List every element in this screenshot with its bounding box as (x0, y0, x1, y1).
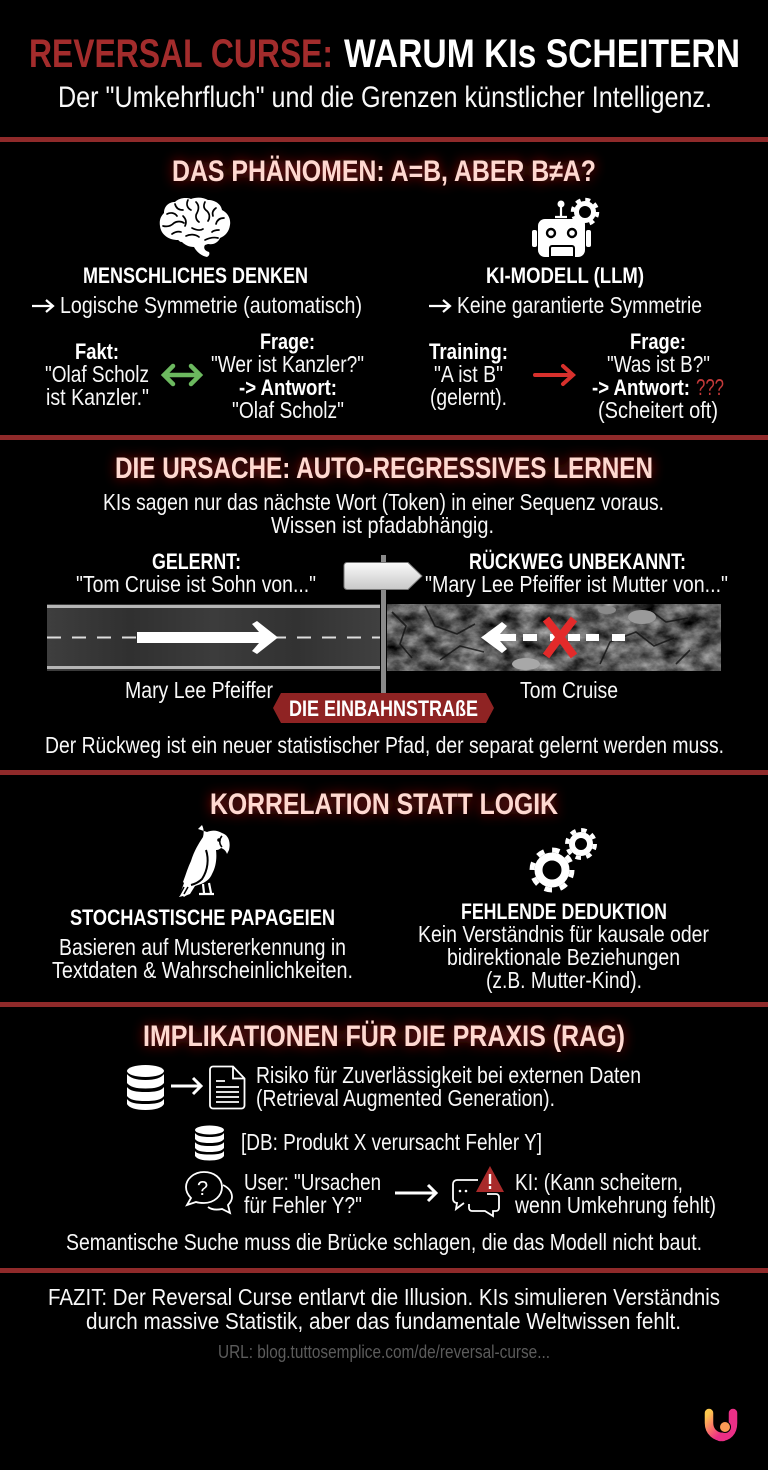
arrow (395, 1185, 436, 1201)
icon: gears (532, 830, 595, 890)
user text: für Fehler Y?" (244, 1192, 362, 1218)
right column: ki-modell: Training: (429, 339, 508, 364)
arrow: green double (164, 366, 200, 384)
road labels: Mary Lee Pfeiffer (125, 677, 273, 703)
arrow (429, 300, 450, 312)
broken road (387, 604, 721, 671)
left column: menschliches denken: Fakt: (75, 339, 119, 364)
label: rückweg unbekannt: RÜCKWEG UNBEKANNT: (469, 549, 686, 574)
right block: fehlende deduktion: FEHLENDE DEDUKTION (461, 899, 667, 924)
signpost (344, 555, 422, 695)
left column: menschliches denken: "Wer ist Kanzler?" (211, 351, 364, 377)
banner: die einbahnstraße: DIE EINBAHNSTRAßE (289, 696, 478, 721)
banner: die einbahnstraße (273, 693, 494, 723)
logo (709, 1413, 733, 1437)
icon: document (210, 1066, 244, 1108)
db text: [DB: Produkt X verursacht Fehler Y] (241, 1129, 542, 1155)
right block: fehlende deduktion: (z.B. Mutter-Kind). (486, 967, 642, 993)
left column: menschliches denken: -> Antwort: (239, 375, 337, 400)
right column: ki-modell (429, 263, 724, 423)
arrow: blocked return (481, 622, 625, 653)
explanation text: Wissen ist pfadabhängig. (271, 512, 494, 538)
risk text (256, 1062, 641, 1111)
heading: die ursache: DIE URSACHE: AUTO-REGRESSIVES LERNEN (115, 452, 653, 485)
label: rückweg unbekannt (425, 549, 728, 597)
icon: parrot (179, 825, 230, 897)
right column: ki-modell: ??? (696, 374, 724, 400)
left column: menschliches denken: "Olaf Scholz (45, 361, 149, 387)
road labels: Tom Cruise (520, 677, 618, 703)
right block: fehlende deduktion: bidirektionale Beziehungen (447, 944, 680, 970)
icon: question chat (186, 1172, 232, 1213)
ki text (514, 1169, 716, 1218)
heading: implikationen: IMPLIKATIONEN FÜR DIE PRAXIS (RAG) (143, 1020, 625, 1053)
right column: ki-modell: Frage: (630, 329, 686, 354)
icon: warning triangle (476, 1166, 504, 1192)
right column: ki-modell: -> Antwort: (592, 375, 690, 400)
icon: database (127, 1065, 164, 1110)
panel: die ursache (45, 452, 728, 758)
smooth road (47, 604, 380, 671)
right column: ki-modell: "Was ist B?" (607, 351, 710, 377)
left block: stochastische papageien: Textdaten & Wahrscheinlichkeiten. (52, 957, 353, 983)
risk text: (Retrieval Augmented Generation). (256, 1085, 555, 1111)
ki text: KI: (Kann scheitern, (515, 1169, 683, 1195)
icon: question chat: ? (197, 1178, 208, 1200)
left block: stochastische papageien (52, 905, 353, 983)
ki text: wenn Umkehrung fehlt) (514, 1192, 716, 1218)
icon: database small (195, 1126, 224, 1160)
label: gelernt (76, 549, 316, 597)
left column: menschliches denken: Logische Symmetrie (automatisch) (60, 292, 362, 318)
left column: menschliches denken: "Olaf Scholz" (232, 397, 344, 423)
icon: red x (546, 619, 574, 656)
right column: ki-modell: Keine garantierte Symmetrie (457, 292, 702, 318)
right block: fehlende deduktion (418, 899, 709, 993)
title: REVERSAL CURSE: (29, 32, 333, 76)
left block: stochastische papageien: Basieren auf Mustererkennung in (59, 934, 346, 960)
icon: robot with gear (532, 200, 598, 257)
heading: das phänomen: DAS PHÄNOMEN: A=B, ABER B≠A? (172, 155, 596, 188)
right block: fehlende deduktion: Kein Verständnis für kausale oder (418, 921, 709, 947)
left column: menschliches denken (32, 263, 364, 423)
right column: ki-modell: KI-MODELL (LLM) (486, 263, 644, 288)
panel: implikationen (66, 1020, 716, 1255)
user text (244, 1169, 381, 1218)
label: gelernt: GELERNT: (152, 549, 241, 574)
arrow (32, 300, 53, 312)
title (29, 32, 740, 76)
explanation text (103, 489, 664, 538)
icon: brain (160, 198, 230, 257)
right column: ki-modell: (Scheitert oft) (598, 397, 718, 423)
heading: korrelation: KORRELATION STATT LOGIK (210, 788, 558, 821)
road labels (125, 677, 618, 703)
left column: menschliches denken: MENSCHLICHES DENKEN (83, 263, 308, 288)
left block: stochastische papageien: STOCHASTISCHE PAPAGEIEN (70, 905, 335, 930)
left column: menschliches denken: Frage: (260, 329, 315, 354)
conclusion: fazit (48, 1284, 720, 1334)
user text: User: "Ursachen (244, 1169, 381, 1195)
icon: chat with warning (453, 1166, 504, 1216)
label: gelernt: "Tom Cruise ist Sohn von..." (76, 571, 316, 597)
panel: das phänomen (32, 155, 724, 423)
arrow: forward (137, 621, 278, 654)
explanation text: KIs sagen nur das nächste Wort (Token) in einer Sequenz voraus. (103, 489, 664, 515)
right column: ki-modell: (gelernt). (430, 384, 507, 410)
conclusion: fazit: durch massive Statistik, aber das fundamentale Weltwissen fehlt. (86, 1308, 681, 1334)
source url: URL: blog.tuttosemplice.com/de/reversal-curse... (218, 1342, 550, 1362)
left column: menschliches denken: ist Kanzler." (46, 384, 149, 410)
risk text: Risiko für Zuverlässigkeit bei externen Daten (256, 1062, 641, 1088)
right column: ki-modell: "A ist B" (434, 361, 503, 387)
arrow (171, 1078, 201, 1094)
arrow: red (535, 366, 573, 384)
panel: korrelation statt logik (52, 788, 709, 993)
